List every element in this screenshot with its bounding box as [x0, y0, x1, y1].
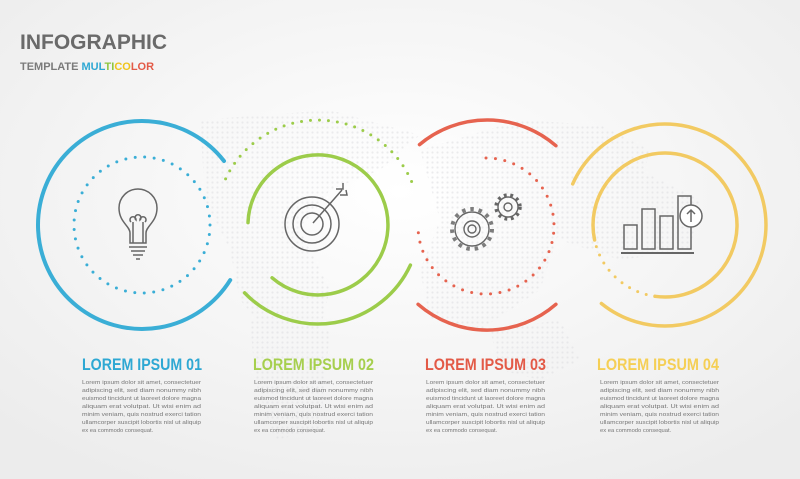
text block 1: ex ea commodo consequat.: [82, 428, 154, 434]
step 3 circle (red): [418, 120, 556, 330]
world map dot background: [200, 110, 700, 440]
text block 3: euismod tincidunt ut laoreet dolore magna: [426, 396, 546, 402]
text block 1: ullamcorper suscipit lobortis nisl ut aliquip: [82, 420, 201, 426]
text block 4: adipiscing elit, sed diam nonummy nibh: [600, 388, 719, 394]
text block 3: aliquam erat volutpat. Ut wisi enim ad: [426, 404, 545, 410]
title: [20, 31, 167, 73]
text block 1: euismod tincidunt ut laoreet dolore magna: [82, 396, 202, 402]
text block 1: aliquam erat volutpat. Ut wisi enim ad: [82, 404, 201, 410]
text block 2: [253, 355, 374, 434]
text block 4: Lorem ipsum dolor sit amet, consectetuer: [600, 380, 719, 386]
text block 3: adipiscing elit, sed diam nonummy nibh: [426, 388, 545, 394]
text block 4: ex ea commodo consequat.: [600, 428, 672, 434]
text block 2: ex ea commodo consequat.: [254, 428, 326, 434]
title: INFOGRAPHIC: [20, 31, 167, 54]
step 4 circle (yellow): [573, 124, 766, 326]
text block 1: adipiscing elit, sed diam nonummy nibh: [82, 388, 201, 394]
text block 1: minim veniam, quis nostrud exerci tation: [82, 412, 201, 418]
text block 2: aliquam erat volutpat. Ut wisi enim ad: [254, 404, 373, 410]
text block 4: ullamcorper suscipit lobortis nisl ut aliquip: [600, 420, 719, 426]
icon: bar chart: [621, 196, 702, 253]
text block 3: [425, 355, 546, 434]
text block 1: Lorem ipsum dolor sit amet, consectetuer: [82, 380, 201, 386]
text block 2: ullamcorper suscipit lobortis nisl ut aliquip: [254, 420, 373, 426]
title: TEMPLATE MULTICOLOR: [20, 61, 154, 73]
text block 4: minim veniam, quis nostrud exerci tation: [600, 412, 719, 418]
text block 4: aliquam erat volutpat. Ut wisi enim ad: [600, 404, 719, 410]
text block 2: minim veniam, quis nostrud exerci tation: [254, 412, 373, 418]
text block 3: minim veniam, quis nostrud exerci tation: [426, 412, 545, 418]
text block 1: LOREM IPSUM 01: [82, 355, 202, 374]
text block 2: LOREM IPSUM 02: [253, 355, 374, 374]
text block 2: Lorem ipsum dolor sit amet, consectetuer: [254, 380, 373, 386]
text block 2: euismod tincidunt ut laoreet dolore magna: [254, 396, 374, 402]
text block 4: LOREM IPSUM 04: [597, 355, 719, 374]
text block 4: [597, 355, 720, 434]
step 1 circle (blue): [38, 121, 230, 329]
icon: light bulb: [119, 189, 157, 259]
icon: target: [285, 183, 347, 251]
text block 3: ex ea commodo consequat.: [426, 428, 498, 434]
text block 1: [82, 355, 202, 434]
text block 3: Lorem ipsum dolor sit amet, consectetuer: [426, 380, 545, 386]
text block 3: ullamcorper suscipit lobortis nisl ut aliquip: [426, 420, 545, 426]
text block 2: adipiscing elit, sed diam nonummy nibh: [254, 388, 373, 394]
step 2 circle (green): [226, 120, 413, 324]
text block 4: euismod tincidunt ut laoreet dolore magna: [600, 396, 720, 402]
icon: gears: [452, 195, 520, 249]
text block 3: LOREM IPSUM 03: [425, 355, 546, 374]
